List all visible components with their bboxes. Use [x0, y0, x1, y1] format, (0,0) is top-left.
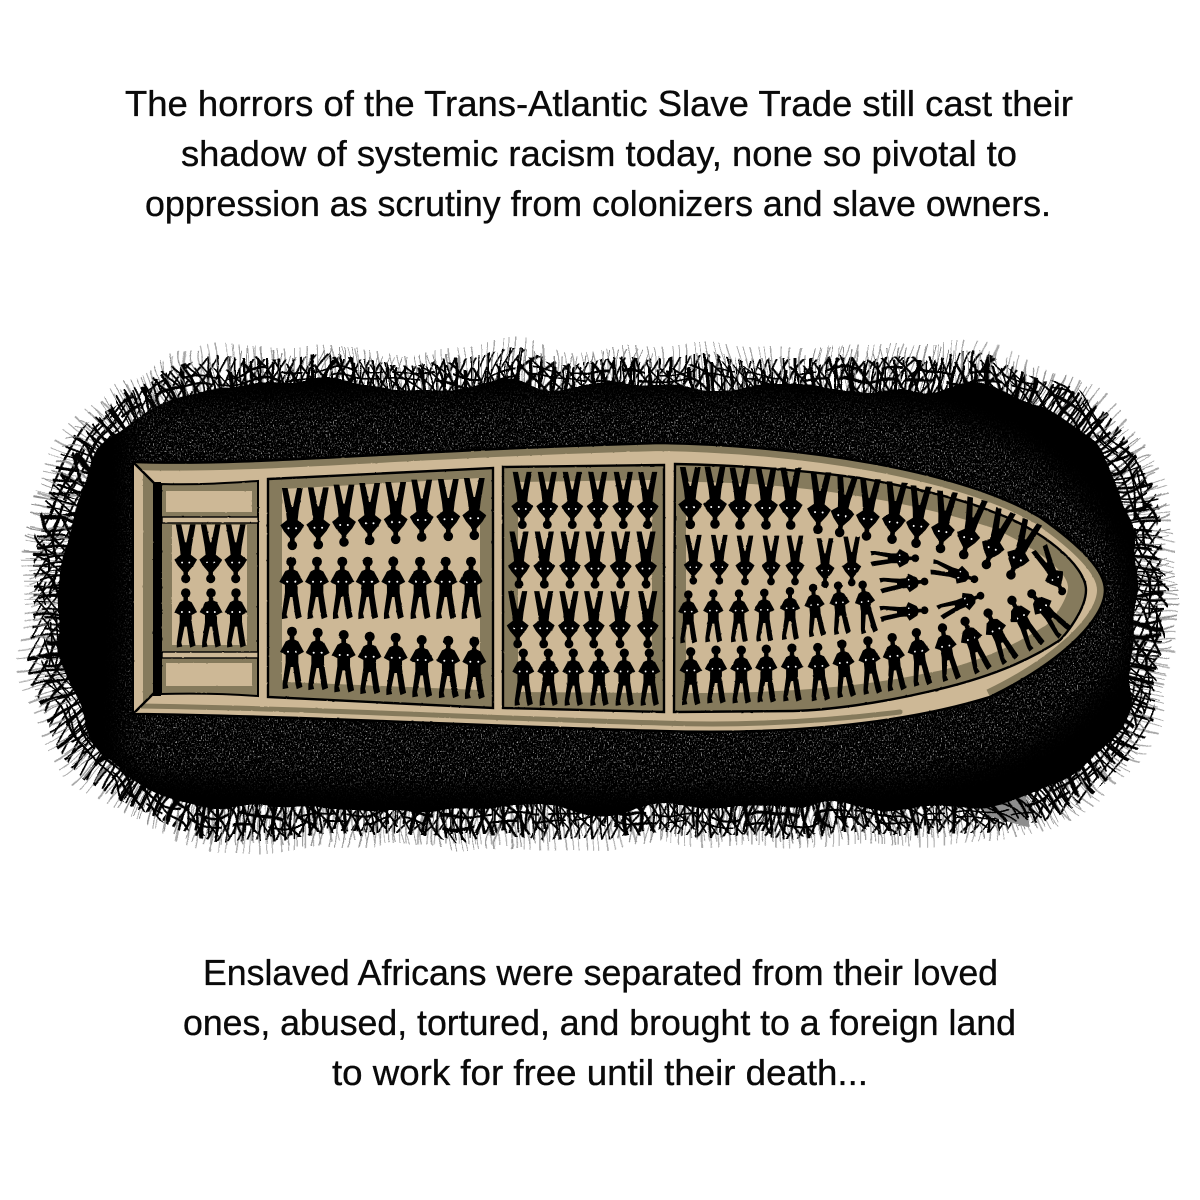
- closing text block: ones, abused, tortured, and brought to a foreign land: [183, 1002, 1016, 1043]
- intro text block: The horrors of the Trans-Atlantic Slave Trade still cast their: [125, 83, 1073, 124]
- intro text block: [125, 83, 1073, 224]
- bow compartment: [674, 464, 1086, 712]
- cabin compartment: [161, 481, 258, 696]
- intro text block: shadow of systemic racism today, none so pivotal to: [181, 133, 1017, 174]
- hatched black shadow around the ship: [48, 372, 1152, 822]
- hull outline: [133, 443, 1105, 732]
- closing text block: Enslaved Africans were separated from their loved: [203, 952, 998, 993]
- intro text block: oppression as scrutiny from colonizers and slave owners.: [145, 183, 1051, 224]
- second compartment: [268, 468, 493, 708]
- stern frame: [133, 462, 161, 714]
- closing text block: to work for free until their death...: [332, 1052, 868, 1093]
- third compartment: [503, 465, 664, 712]
- hull body: [133, 443, 1105, 732]
- hull shading band: [133, 443, 1105, 724]
- slave ship hull: [133, 443, 1105, 732]
- closing text block: [183, 952, 1016, 1093]
